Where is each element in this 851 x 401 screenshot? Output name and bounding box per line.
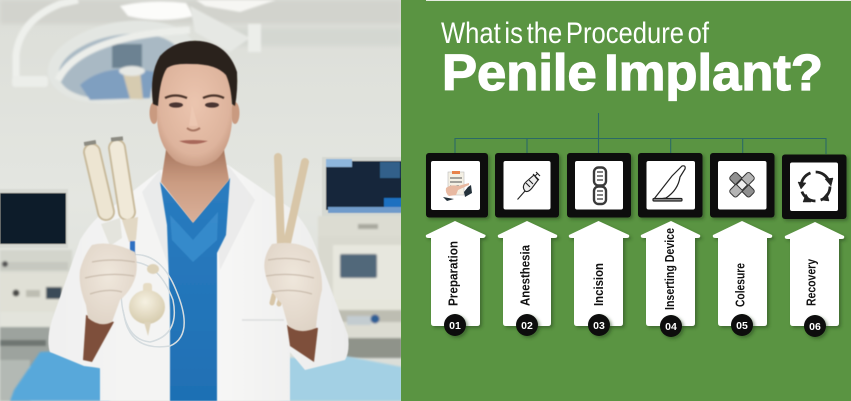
label: Anesthesia: Anesthesia xyxy=(518,244,532,306)
label: Preparation: Preparation xyxy=(446,241,460,306)
icon: scalpel xyxy=(653,166,685,201)
number badge 05: 05 xyxy=(736,320,748,332)
nose and mouth xyxy=(179,105,208,144)
right gloved hand xyxy=(264,243,322,331)
blue bed drapes xyxy=(10,351,402,401)
step arrow 5 xyxy=(713,221,772,326)
label: Colesure: Colesure xyxy=(734,263,748,307)
number badge 03: 03 xyxy=(593,320,605,332)
number badge 06 xyxy=(804,315,826,337)
blue scrubs xyxy=(160,178,230,401)
surgical lamp xyxy=(12,0,203,114)
step 2: anesthesia xyxy=(495,153,559,336)
head with face and hair xyxy=(150,41,240,166)
operating room background xyxy=(0,0,402,401)
icon box 2 xyxy=(495,153,559,218)
icon: chain links xyxy=(594,168,606,204)
step 5: closure xyxy=(710,153,774,336)
icon: syringe xyxy=(518,172,540,200)
green panel background xyxy=(401,0,851,401)
step arrow 3 xyxy=(569,221,629,326)
step arrow 2 xyxy=(498,221,557,326)
icon: crossed bandages xyxy=(729,171,755,198)
step arrow 1 xyxy=(426,221,486,326)
number badge 03 xyxy=(588,314,610,336)
icon box 5 xyxy=(710,153,774,218)
face xyxy=(157,58,232,166)
photo: surgeon holding implant components xyxy=(0,0,405,401)
implant tubing xyxy=(121,254,184,347)
icon: circular arrows xyxy=(798,172,833,202)
title line two: Penile Implant? xyxy=(442,44,823,101)
step arrow 6 xyxy=(785,222,844,326)
ears xyxy=(150,102,240,124)
step 1: preparation xyxy=(426,153,488,336)
number badge 04 xyxy=(660,315,682,337)
label: Inserting Device: Inserting Device xyxy=(663,228,677,310)
number badge 02 xyxy=(516,314,538,336)
number badge 02: 02 xyxy=(521,320,533,332)
right implant rods xyxy=(272,157,305,304)
number badge 01 xyxy=(444,314,466,336)
connector lines xyxy=(455,113,826,154)
label: Incision: Incision xyxy=(592,263,606,306)
title xyxy=(441,17,823,101)
ceiling light panels xyxy=(120,0,276,20)
label: Recovery: Recovery xyxy=(804,259,818,306)
white lab coat xyxy=(48,165,349,401)
step 3: incision xyxy=(567,153,631,336)
eyes and brows xyxy=(165,96,224,108)
left equipment cart xyxy=(0,250,80,401)
left implant cylinders xyxy=(84,136,138,256)
hair xyxy=(152,41,237,106)
step 4: inserting device xyxy=(638,153,702,337)
icon: clipboard and hands xyxy=(443,171,472,201)
number badge 05 xyxy=(731,314,753,336)
left monitor xyxy=(0,189,68,248)
icon box 4 xyxy=(638,153,702,218)
ceiling arm at right xyxy=(190,6,261,52)
step arrow 4 xyxy=(641,221,700,326)
number badge 01: 01 xyxy=(449,320,461,332)
title line one: What is the Procedure of xyxy=(441,17,710,50)
forearms xyxy=(83,315,318,362)
implant pump reservoir xyxy=(129,264,165,336)
right monitor xyxy=(322,157,402,217)
neck xyxy=(161,150,229,223)
number badge 04: 04 xyxy=(665,321,677,333)
icon box 1 xyxy=(426,153,488,218)
left gloved hand xyxy=(80,244,137,324)
step 6: recovery xyxy=(782,154,846,337)
right equipment stack xyxy=(318,216,405,358)
number badge 06: 06 xyxy=(809,321,821,333)
icon box 6 xyxy=(782,154,846,219)
icon box 3 xyxy=(567,153,631,218)
